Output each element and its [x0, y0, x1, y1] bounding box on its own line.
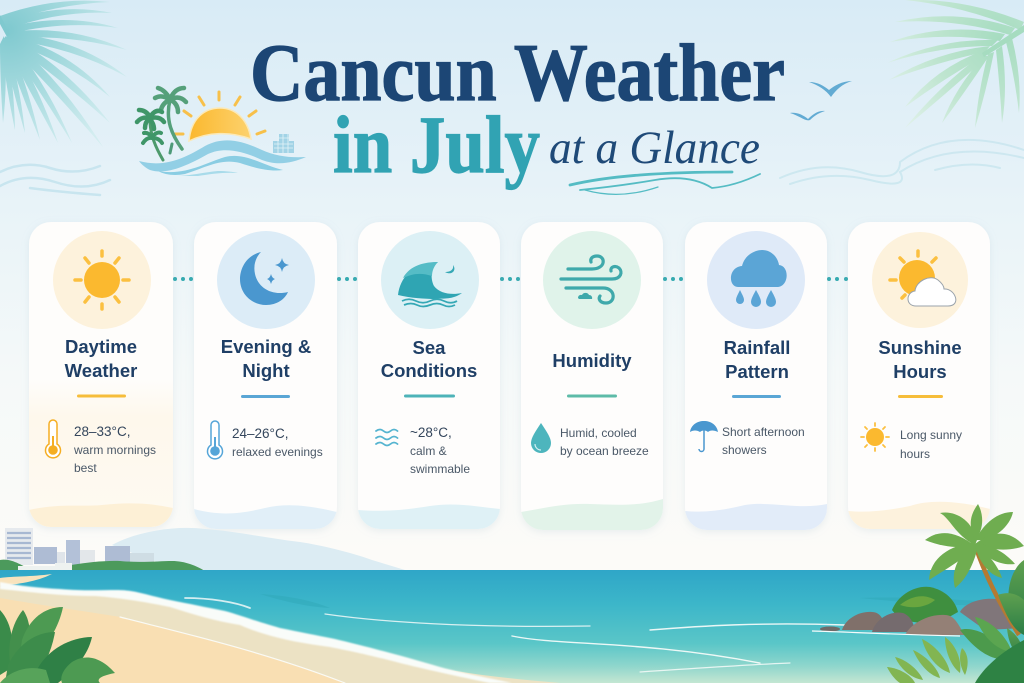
- sea: [0, 570, 1024, 683]
- palm frond: top right: [887, 0, 1024, 128]
- heading: Sea: [413, 337, 446, 358]
- heading: Rainfall: [724, 337, 790, 358]
- title: [250, 27, 785, 194]
- heading: Evening &: [221, 336, 311, 357]
- logo sun: [189, 108, 251, 141]
- birds: [790, 81, 852, 120]
- text: calm &: [410, 444, 447, 458]
- heading: Hours: [893, 361, 947, 382]
- logo hotel: [273, 134, 294, 153]
- beach: [0, 574, 560, 683]
- text: [560, 426, 649, 458]
- icon: sun and cloud: [872, 232, 968, 328]
- connector dots: [173, 277, 848, 281]
- panel: daytime weather: [29, 222, 173, 527]
- title line 1: Cancun Weather: [250, 27, 785, 118]
- text: relaxed evenings: [232, 445, 323, 459]
- green headland: [0, 560, 205, 575]
- title line 2: in July: [333, 99, 540, 190]
- panel: evening and night: [194, 222, 337, 529]
- logo: sun, palms and waves: [137, 88, 306, 176]
- text: hours: [900, 447, 930, 461]
- text: [73, 424, 156, 475]
- icon: moon: [217, 231, 315, 329]
- decorative waves: right: [780, 140, 1024, 184]
- icon: small sun: [861, 423, 889, 451]
- wet sand: [0, 586, 560, 683]
- heading: [724, 337, 790, 382]
- hotel skyline: [5, 528, 154, 565]
- decorative waves: left: [0, 165, 110, 195]
- logo waves: [139, 140, 306, 172]
- darker swell bands: [260, 594, 1024, 608]
- title swoosh: [570, 172, 760, 194]
- heading: Conditions: [381, 360, 477, 381]
- palm tree: [925, 504, 1024, 635]
- heading: Humidity: [552, 350, 632, 371]
- title script: at a Glance: [549, 122, 760, 174]
- icon: waves: [376, 430, 398, 446]
- foliage: bottom left: [0, 607, 115, 683]
- panel: humidity: [521, 222, 663, 530]
- text: showers: [722, 443, 767, 457]
- palm frond: top left: [0, 1, 127, 147]
- logo rays: [175, 92, 265, 134]
- icon: umbrella: [690, 421, 718, 452]
- icon: rain cloud: [707, 231, 805, 329]
- panel: sunshine hours: [848, 222, 990, 529]
- text: 24–26°C,: [232, 426, 288, 441]
- text: [410, 425, 470, 476]
- heading: Night: [242, 360, 290, 381]
- text: [722, 425, 805, 457]
- text: ~28°C,: [410, 425, 452, 440]
- text: Humid, cooled: [560, 426, 637, 440]
- heading: [221, 336, 311, 381]
- heading: Weather: [65, 360, 137, 381]
- text: by ocean breeze: [560, 444, 649, 458]
- icon: wind: [543, 231, 641, 329]
- icon: sun: [53, 231, 151, 329]
- text: swimmable: [410, 462, 470, 476]
- beachfront hotel: [18, 563, 72, 573]
- panel: sea conditions: [358, 222, 500, 529]
- icon: droplet: [531, 423, 551, 453]
- distant mountain: [112, 528, 405, 570]
- text: 28–33°C,: [74, 424, 130, 439]
- heading: [381, 337, 477, 381]
- heading: Daytime: [65, 336, 137, 357]
- panel: rainfall pattern: [685, 222, 827, 530]
- text: Short afternoon: [722, 425, 805, 439]
- rocks and bush: [812, 587, 1024, 636]
- icon: thermometer: [208, 421, 223, 459]
- dry sand: [0, 598, 345, 683]
- logo palms: [137, 88, 186, 160]
- heading: Sunshine: [878, 337, 962, 358]
- icon: wave: [381, 231, 479, 329]
- heading: [65, 336, 137, 381]
- text: best: [74, 461, 97, 475]
- heading: [878, 337, 962, 382]
- text: [900, 428, 962, 461]
- surf foam: [0, 582, 845, 683]
- text: Long sunny: [900, 428, 962, 442]
- text: warm mornings: [73, 443, 156, 457]
- heading: Pattern: [725, 361, 789, 382]
- icon: thermometer: [46, 420, 61, 458]
- text: [232, 426, 323, 459]
- foliage: bottom right: [887, 560, 1024, 683]
